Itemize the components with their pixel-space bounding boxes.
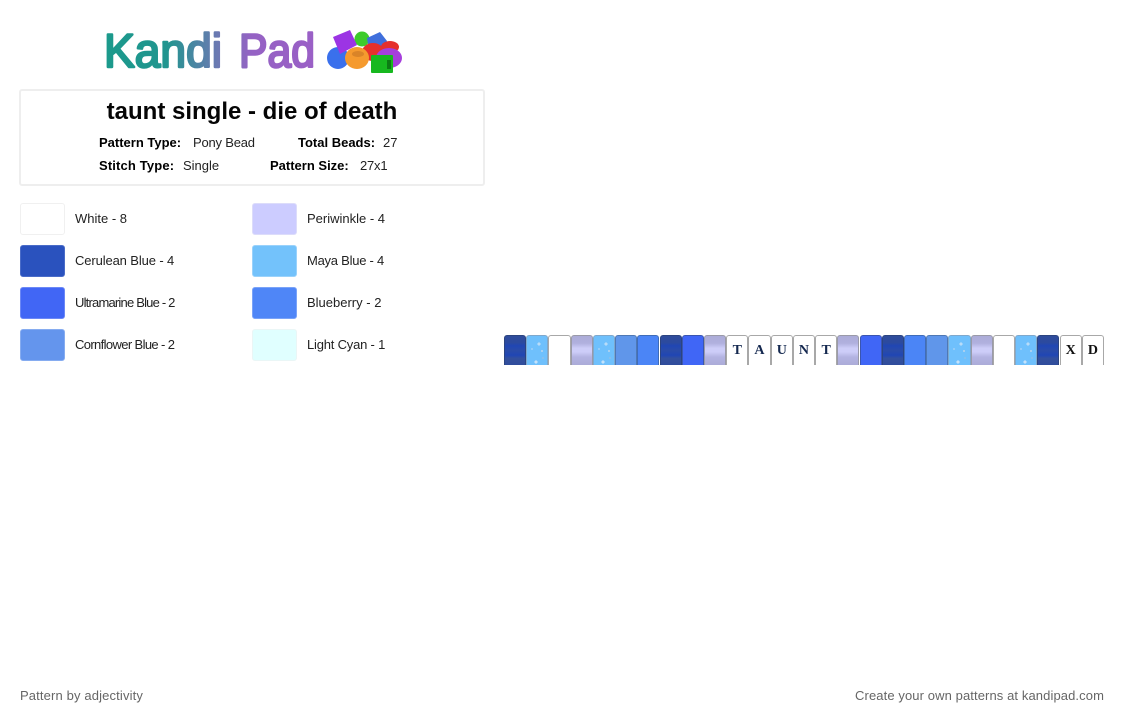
panel: pattern details [19,89,485,186]
pattern type: Pattern Type: [99,135,181,150]
legend item: Light Cyan: Light Cyan - 1 [307,337,385,352]
bead pattern strip: X [1066,343,1076,358]
legend item: White: White - 8 [75,211,127,226]
logo wordmark [104,24,315,77]
logo icon: pile of beads [327,30,402,73]
legend item: Cerulean Blue [20,245,174,277]
logo: Kandi Pad [104,24,402,77]
bead pattern strip: T [733,343,742,358]
footer: pattern credit: Pattern by adjectivity [20,688,143,703]
legend item: Maya Blue [252,245,384,277]
legend item: Periwinkle: Periwinkle - 4 [307,211,385,226]
stitch type: Stitch Type: [99,158,174,173]
legend item: Cornflower Blue: Cornflower Blue - 2 [75,337,174,352]
bead pattern strip: A [754,343,765,358]
title: taunt single - die of death [107,98,397,125]
legend item: Ultramarine Blue: Ultramarine Blue - 2 [75,295,175,310]
bead pattern strip: N [799,343,809,358]
legend item: Maya Blue: Maya Blue - 4 [307,253,384,268]
legend item: Blueberry [252,287,381,319]
legend item: Periwinkle [252,203,385,235]
legend: bead colours [20,203,385,361]
logo wordmark: Kandi [104,24,222,77]
bead pattern strip: D [1088,343,1098,358]
footer: site credit: Create your own patterns at kandipad.com [855,688,1104,703]
bead pattern strip: U [777,343,787,358]
legend item: White [20,203,127,235]
logo wordmark: Pad [239,24,315,77]
legend item: Light Cyan [252,329,385,361]
legend item: Ultramarine Blue [20,287,175,319]
legend item: Cerulean Blue: Cerulean Blue - 4 [75,253,174,268]
total beads: Total Beads: [298,135,375,150]
pattern type value: Pony Bead [193,135,255,150]
stitch type value: Single [183,158,219,173]
legend item: Blueberry: Blueberry - 2 [307,295,381,310]
total beads value: 27 [383,135,397,150]
pattern size: Pattern Size: [270,158,349,173]
pattern size value: 27x1 [360,158,387,173]
bead pattern strip: T [822,343,831,358]
legend item: Cornflower Blue [20,329,174,361]
